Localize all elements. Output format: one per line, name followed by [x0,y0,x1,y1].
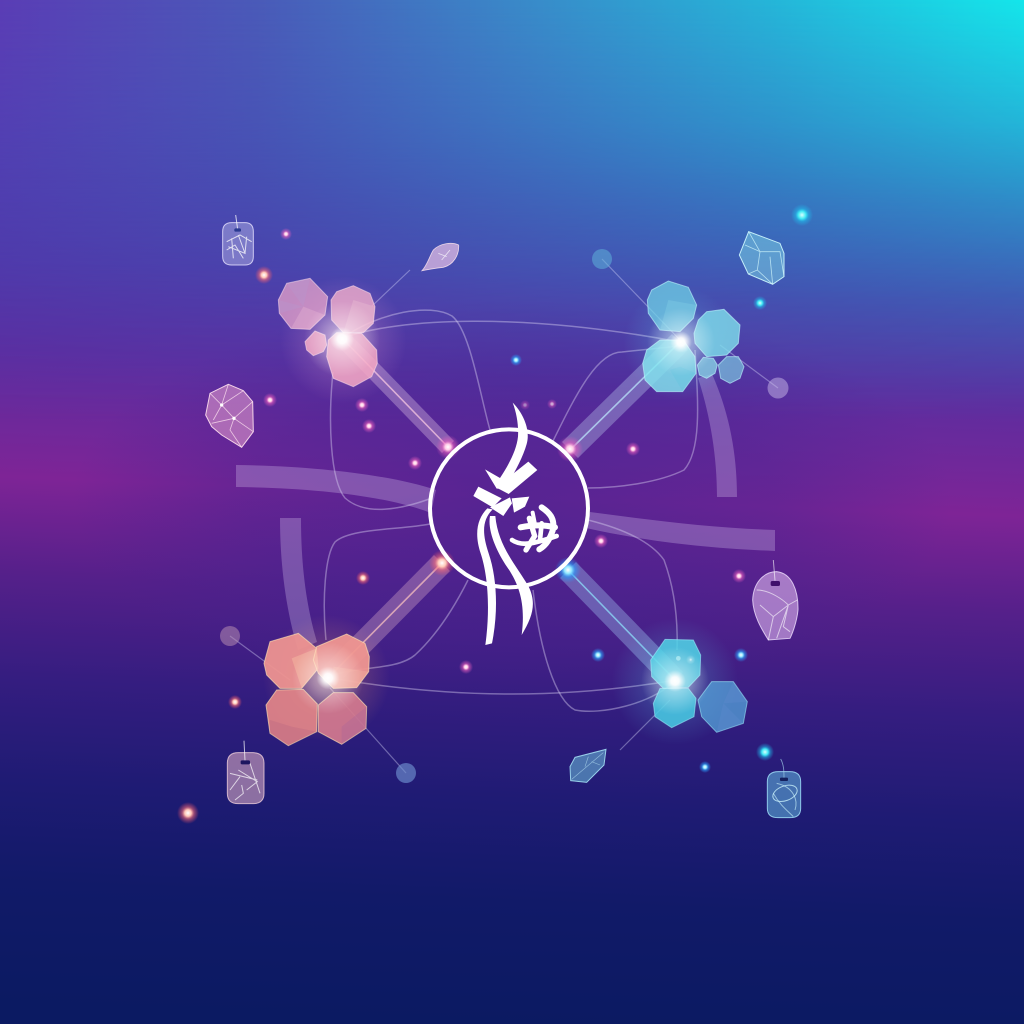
translucent curved bands [236,374,775,650]
beam end nodes [429,435,583,583]
icon: tag gem, right [753,560,798,640]
icon: faceted gem, left [206,384,253,447]
emblem ring [430,429,588,587]
icon: faceted gem, top right [739,232,784,284]
hub glows [292,301,715,715]
light beams to hub [320,332,688,688]
icon: tag, bottom left [227,741,264,804]
satellite dots [220,249,788,783]
emblem small brush glyph [512,507,557,550]
icon: leaf, bottom right [570,749,606,782]
orange crystal cluster, bottom left [263,615,390,746]
icon: tag, top left [223,215,253,265]
blue crystal cluster, bottom right [612,618,747,745]
cyan crystal cluster, top right [623,281,744,400]
emblem brush strokes [473,403,537,645]
icon: leaf, top left [422,243,459,271]
small glowing particles [177,204,813,824]
icon: tag, bottom right [767,759,801,818]
thin connector curves [324,310,698,711]
central emblem [430,403,588,645]
pink crystal cluster, top left [278,277,407,403]
thin pointer lines to satellite dots [230,259,778,773]
